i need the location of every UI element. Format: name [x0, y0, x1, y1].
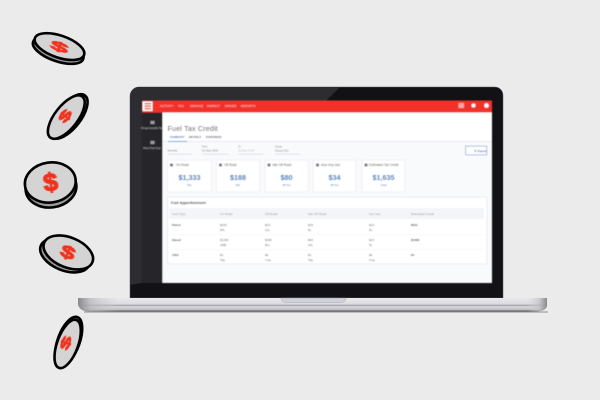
card: aux use: 89 hrs — [331, 183, 339, 187]
row: diesel: Diesel — [172, 238, 181, 242]
row: cng: CNG — [172, 253, 179, 257]
table: fuel apportionment: Off Road — [265, 212, 278, 216]
row: cng: $1 — [220, 253, 224, 257]
top nav bar: INSPECT — [207, 104, 220, 108]
laptop — [78, 87, 548, 312]
card: idle off road: 89 hrs — [283, 183, 291, 187]
card: estimated tax credit: Estimated Tax Credit — [369, 163, 398, 167]
sidebar: Fleet Fuel Cost — [143, 146, 161, 150]
table: fuel apportionment: Estimated Credit — [411, 212, 434, 216]
top nav bar: DRIVER — [225, 104, 237, 108]
filters: Group (21) — [275, 148, 289, 152]
row: petrol: $10 — [369, 223, 374, 227]
table: fuel apportionment: Idle Off Road — [308, 212, 326, 216]
hinge notch — [281, 298, 346, 302]
row: petrol: $201 — [411, 223, 418, 227]
row: diesel: $1400 — [411, 238, 420, 242]
card: idle off road: $80 — [280, 173, 292, 182]
coin 5 — [49, 313, 88, 371]
page header: SUMMARY — [170, 135, 185, 139]
top nav bar — [142, 100, 492, 112]
row: petrol: $16 — [308, 223, 313, 227]
row: cng: 0 kg — [369, 258, 375, 262]
coin 3 — [22, 159, 79, 211]
card: on road — [168, 160, 212, 192]
row: diesel: $24 — [369, 238, 374, 242]
page header: EXPENSES — [206, 135, 222, 139]
card: off road: Off Road — [224, 163, 237, 167]
row: petrol: 9L — [308, 228, 312, 232]
filters: 31 May 2018 — [238, 148, 255, 152]
filters: To — [238, 146, 241, 148]
laptop base — [78, 298, 548, 312]
row: cng: $1 — [308, 253, 312, 257]
table: fuel apportionment — [168, 197, 487, 264]
card: on road: 94L — [187, 183, 192, 187]
card: off road — [216, 160, 260, 192]
export button — [466, 146, 487, 155]
page header: DETAILS — [189, 135, 201, 139]
coin 1: $ — [49, 38, 70, 57]
row: cng — [172, 253, 415, 262]
coin 2: $ — [55, 106, 75, 126]
filters — [168, 146, 300, 154]
top nav bar: TAX — [178, 104, 184, 108]
coin 4: $ — [58, 240, 78, 264]
row: diesel: $165 — [265, 238, 272, 242]
filters: Group — [275, 146, 282, 148]
coin 2 — [41, 88, 94, 145]
card: idle off road: Idle Off Road — [272, 163, 291, 167]
row: diesel: 16L — [308, 243, 313, 247]
row: cng: 1 kg — [265, 258, 271, 262]
row: cng: 7kg — [220, 258, 225, 262]
row: cng: $0 — [265, 253, 269, 257]
row: diesel: 81L — [265, 243, 270, 247]
row: petrol: 5L — [369, 228, 373, 232]
card: on road: On Road — [176, 163, 189, 167]
table: fuel apportionment: Fuel Type — [172, 212, 186, 216]
card: aux use: Aux/ Any Use — [321, 163, 340, 167]
filters: From — [202, 146, 208, 148]
row: cng: $0 — [369, 253, 373, 257]
card: off road: 94L — [236, 183, 241, 187]
table: fuel apportionment: Fuel Apportionment — [171, 201, 207, 205]
logo — [142, 102, 152, 111]
top nav bar: SERVICE — [190, 104, 203, 108]
filters: Monthly — [168, 148, 178, 152]
row: petrol: 11L — [265, 228, 270, 232]
row: cng: 7kg — [308, 258, 313, 262]
row: petrol: 94L — [220, 228, 225, 232]
coin 1 — [30, 28, 88, 69]
sidebar — [141, 112, 164, 283]
card: estimated tax credit — [362, 160, 405, 192]
row: diesel — [172, 238, 420, 247]
sidebar: Fringe benefits Tax — [141, 126, 164, 130]
card: off road: $188 — [230, 173, 246, 182]
row: petrol — [172, 223, 418, 232]
card: estimated tax credit: $1,635 — [373, 173, 394, 182]
row: petrol: $102 — [220, 223, 227, 227]
top nav bar: REPORTS — [241, 104, 255, 108]
row: diesel: $1230 — [220, 238, 229, 242]
row: diesel: 5L — [369, 243, 373, 247]
card: aux use: $34 — [328, 173, 340, 182]
app screen — [141, 100, 492, 283]
card: on road: $1,333 — [179, 173, 200, 182]
title: Fuel Tax Credit — [168, 124, 218, 133]
row: petrol: $23 — [265, 223, 270, 227]
top nav bar: ACTIVITY — [160, 104, 174, 108]
table: fuel apportionment: Aux Use — [369, 212, 381, 216]
row: diesel: $64 — [308, 238, 313, 242]
page header — [162, 112, 492, 142]
table: fuel apportionment: On Road — [220, 212, 233, 216]
row: diesel: 188L — [220, 243, 227, 247]
card: aux use — [313, 160, 356, 192]
filters: 01 May 2018 — [202, 148, 219, 152]
laptop lid — [130, 87, 503, 298]
export button: ⬆ Export — [474, 149, 487, 153]
coin 4 — [35, 229, 98, 279]
card: estimated tax credit: Total — [381, 183, 387, 187]
card: idle off road — [265, 160, 308, 192]
coin 3: $ — [42, 168, 60, 197]
row: petrol: Petrol — [172, 223, 181, 227]
coin 5: $ — [58, 334, 75, 352]
row: cng: $4 — [411, 253, 415, 257]
